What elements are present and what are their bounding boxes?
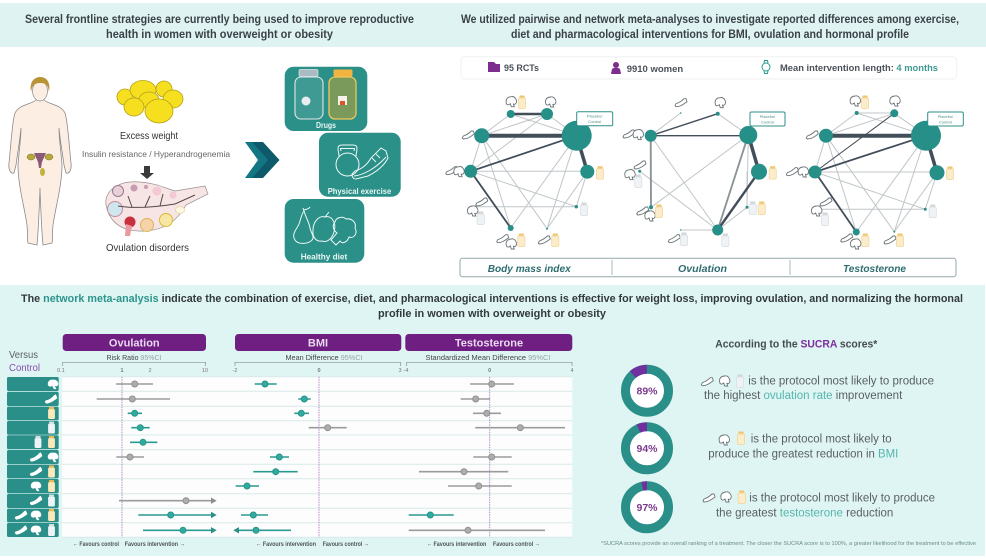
icon: folder <box>488 62 500 72</box>
icon: pear <box>294 207 313 243</box>
axis: standardized mean difference: 4 <box>570 368 574 374</box>
panel: network labels <box>460 258 956 277</box>
donut: 94 percent: 94% <box>636 443 658 455</box>
label: drugs: Drugs <box>316 120 336 130</box>
stat: women: 9910 women <box>627 64 683 75</box>
forest plot: ovulation <box>97 381 217 534</box>
node label: placebo or control: Placebo/ <box>760 114 776 119</box>
heading: network meta-analysis result: profile in women with overweight or obesity <box>378 308 607 320</box>
icon: apple <box>313 212 335 241</box>
SUCRA statement: testosterone: is the protocol most likely to produce <box>749 493 935 505</box>
favours labels: ← Favours intervention <box>256 541 316 548</box>
axis: risk ratio <box>57 353 208 374</box>
icon: running shoe <box>352 148 388 179</box>
card: drugs <box>285 67 367 131</box>
donut: 89 percent: 89% <box>636 386 658 398</box>
card: healthy diet <box>285 199 364 263</box>
column header: BMI: BMI <box>308 338 328 350</box>
SUCRA statement: ovulation <box>701 374 934 402</box>
donut: 97 percent: 97% <box>636 502 658 514</box>
node icons <box>786 96 954 249</box>
SUCRA statement: testosterone <box>703 490 935 520</box>
column header: ovulation <box>63 334 206 351</box>
axis: mean difference: -2 <box>233 368 237 374</box>
heading: meta-analyses: diet and pharmacological interventions for BMI, ovulation and hormonal profile <box>511 29 909 41</box>
axis: standardized mean difference <box>404 353 574 374</box>
axis: risk ratio: 1 <box>120 368 124 374</box>
background panel: results section <box>0 285 985 556</box>
column header: testosterone <box>405 334 572 351</box>
network: body mass index <box>446 96 613 249</box>
axis: mean difference <box>233 353 402 374</box>
background panel: top right banner <box>450 3 986 47</box>
heading: SUCRA: According to the SUCRA scores* <box>715 339 878 351</box>
node label: placebo or control <box>577 112 613 126</box>
node label: placebo or control: Control <box>588 119 601 124</box>
forest plot: BMI <box>233 381 347 534</box>
label: versus control: Control <box>9 363 40 374</box>
arrow: chevrons <box>245 142 280 178</box>
arrow: down <box>140 166 154 179</box>
column header: ovulation: Ovulation <box>109 338 160 350</box>
heading: frontline strategies: health in women with overweight or obesity <box>106 29 334 41</box>
stat: trials: 95 RCTs <box>504 63 539 74</box>
axis: standardized mean difference: 0 <box>488 368 491 374</box>
footnote: *SUCRA scores provide an overall ranking of a treatment. The closer the SUCRA score is to 100%, a greater likelihood for the treatment to be effective <box>601 541 976 547</box>
label: excess weight: Excess weight <box>120 130 178 142</box>
column header: testosterone: Testosterone <box>455 338 523 350</box>
label: ovulation: Ovulation <box>678 263 727 275</box>
favours labels: ← Favours intervention <box>427 541 486 548</box>
label: versus control: Versus <box>9 350 38 361</box>
node label: placebo or control: Control <box>761 119 774 124</box>
SUCRA statement: BMI <box>708 432 898 460</box>
forest plot: testosterone <box>409 381 565 533</box>
label: healthy diet: Healthy diet <box>301 251 347 261</box>
label: ovulation disorders: Ovulation disorders <box>106 242 189 254</box>
label: testosterone: Testosterone <box>843 263 906 275</box>
axis: standardized mean difference: Standardized Mean Difference 95%CI <box>426 353 550 362</box>
axis: risk ratio: 2 <box>148 368 152 374</box>
label: insulin resistance: Insulin resistance / Hyperandrogenemia <box>82 149 230 159</box>
axis: risk ratio: 0.1 <box>57 368 65 374</box>
node label: placebo or control <box>750 112 785 126</box>
axis: mean difference: 3 <box>398 368 402 374</box>
node label: placebo or control: Placebo/ <box>938 114 954 119</box>
label: physical exercise: Physical exercise <box>328 186 391 196</box>
icon: broccoli <box>331 217 356 245</box>
icon: kettlebell <box>336 145 359 176</box>
axis: risk ratio: 10 <box>202 368 208 374</box>
icon: person <box>611 62 621 74</box>
node icons <box>446 96 604 249</box>
label: body mass index: Body mass index <box>488 263 572 275</box>
network: ovulation <box>623 98 785 246</box>
node label: placebo or control: Placebo/ <box>587 114 603 118</box>
axis: standardized mean difference: -4 <box>404 368 408 374</box>
illustration: female body <box>9 77 71 245</box>
axis: mean difference: Mean Difference 95%CI <box>286 353 362 362</box>
axis: risk ratio: Risk Ratio 95%CI <box>106 353 161 362</box>
illustration: ovary <box>106 182 208 236</box>
label: versus control <box>9 350 40 374</box>
favours labels: ← Favours control <box>73 541 119 548</box>
SUCRA statement: ovulation: is the protocol most likely to produce <box>748 375 934 387</box>
favours labels: Favours intervention → <box>125 541 185 548</box>
SUCRA statement: testosterone: the greatest testosterone reduction <box>716 508 893 520</box>
plot background and row separators <box>62 377 572 537</box>
node icons <box>623 98 776 246</box>
axis: mean difference: 0 <box>317 368 321 374</box>
node label: placebo or control <box>928 112 963 126</box>
donut: 97 percent <box>622 482 672 532</box>
heading: frontline strategies <box>25 14 414 41</box>
background panel: top left banner <box>0 3 450 47</box>
icon: watch <box>762 60 770 74</box>
favours labels: Favours control → <box>323 541 369 548</box>
card: physical exercise <box>319 133 401 197</box>
donut: 89 percent <box>617 360 677 421</box>
stat: intervention length: Mean intervention length: 4 months <box>780 63 938 74</box>
heading: network meta-analysis result: The network meta-analysis indicate the combination of exercise, diet, and pharmacological interventions is effective for weight loss, improving ovulation, and normalizing the hormonal <box>21 293 963 305</box>
favours labels <box>73 541 540 548</box>
row labels: versus control interventions <box>7 377 59 537</box>
SUCRA statement: BMI: is the protocol most likely to <box>751 433 892 445</box>
favours labels: Favours control → <box>493 541 540 548</box>
donut: 94 percent <box>619 420 675 476</box>
column header: BMI <box>235 334 401 351</box>
heading: network meta-analysis result <box>21 293 963 320</box>
panel: study statistics <box>461 57 957 79</box>
heading: frontline strategies: Several frontline strategies are currently being used to improve reproductive <box>25 14 414 26</box>
SUCRA statement: BMI: produce the greatest reduction in BMI <box>708 448 898 460</box>
icon: grey bottle <box>295 70 323 119</box>
heading: meta-analyses <box>461 14 959 41</box>
network: testosterone <box>786 96 963 249</box>
SUCRA statement: ovulation: the highest ovulation rate improvement <box>704 390 903 402</box>
icon: fat cells <box>117 80 183 123</box>
node label: placebo or control: Control <box>939 119 952 124</box>
icon: yellow bottle <box>329 70 356 119</box>
